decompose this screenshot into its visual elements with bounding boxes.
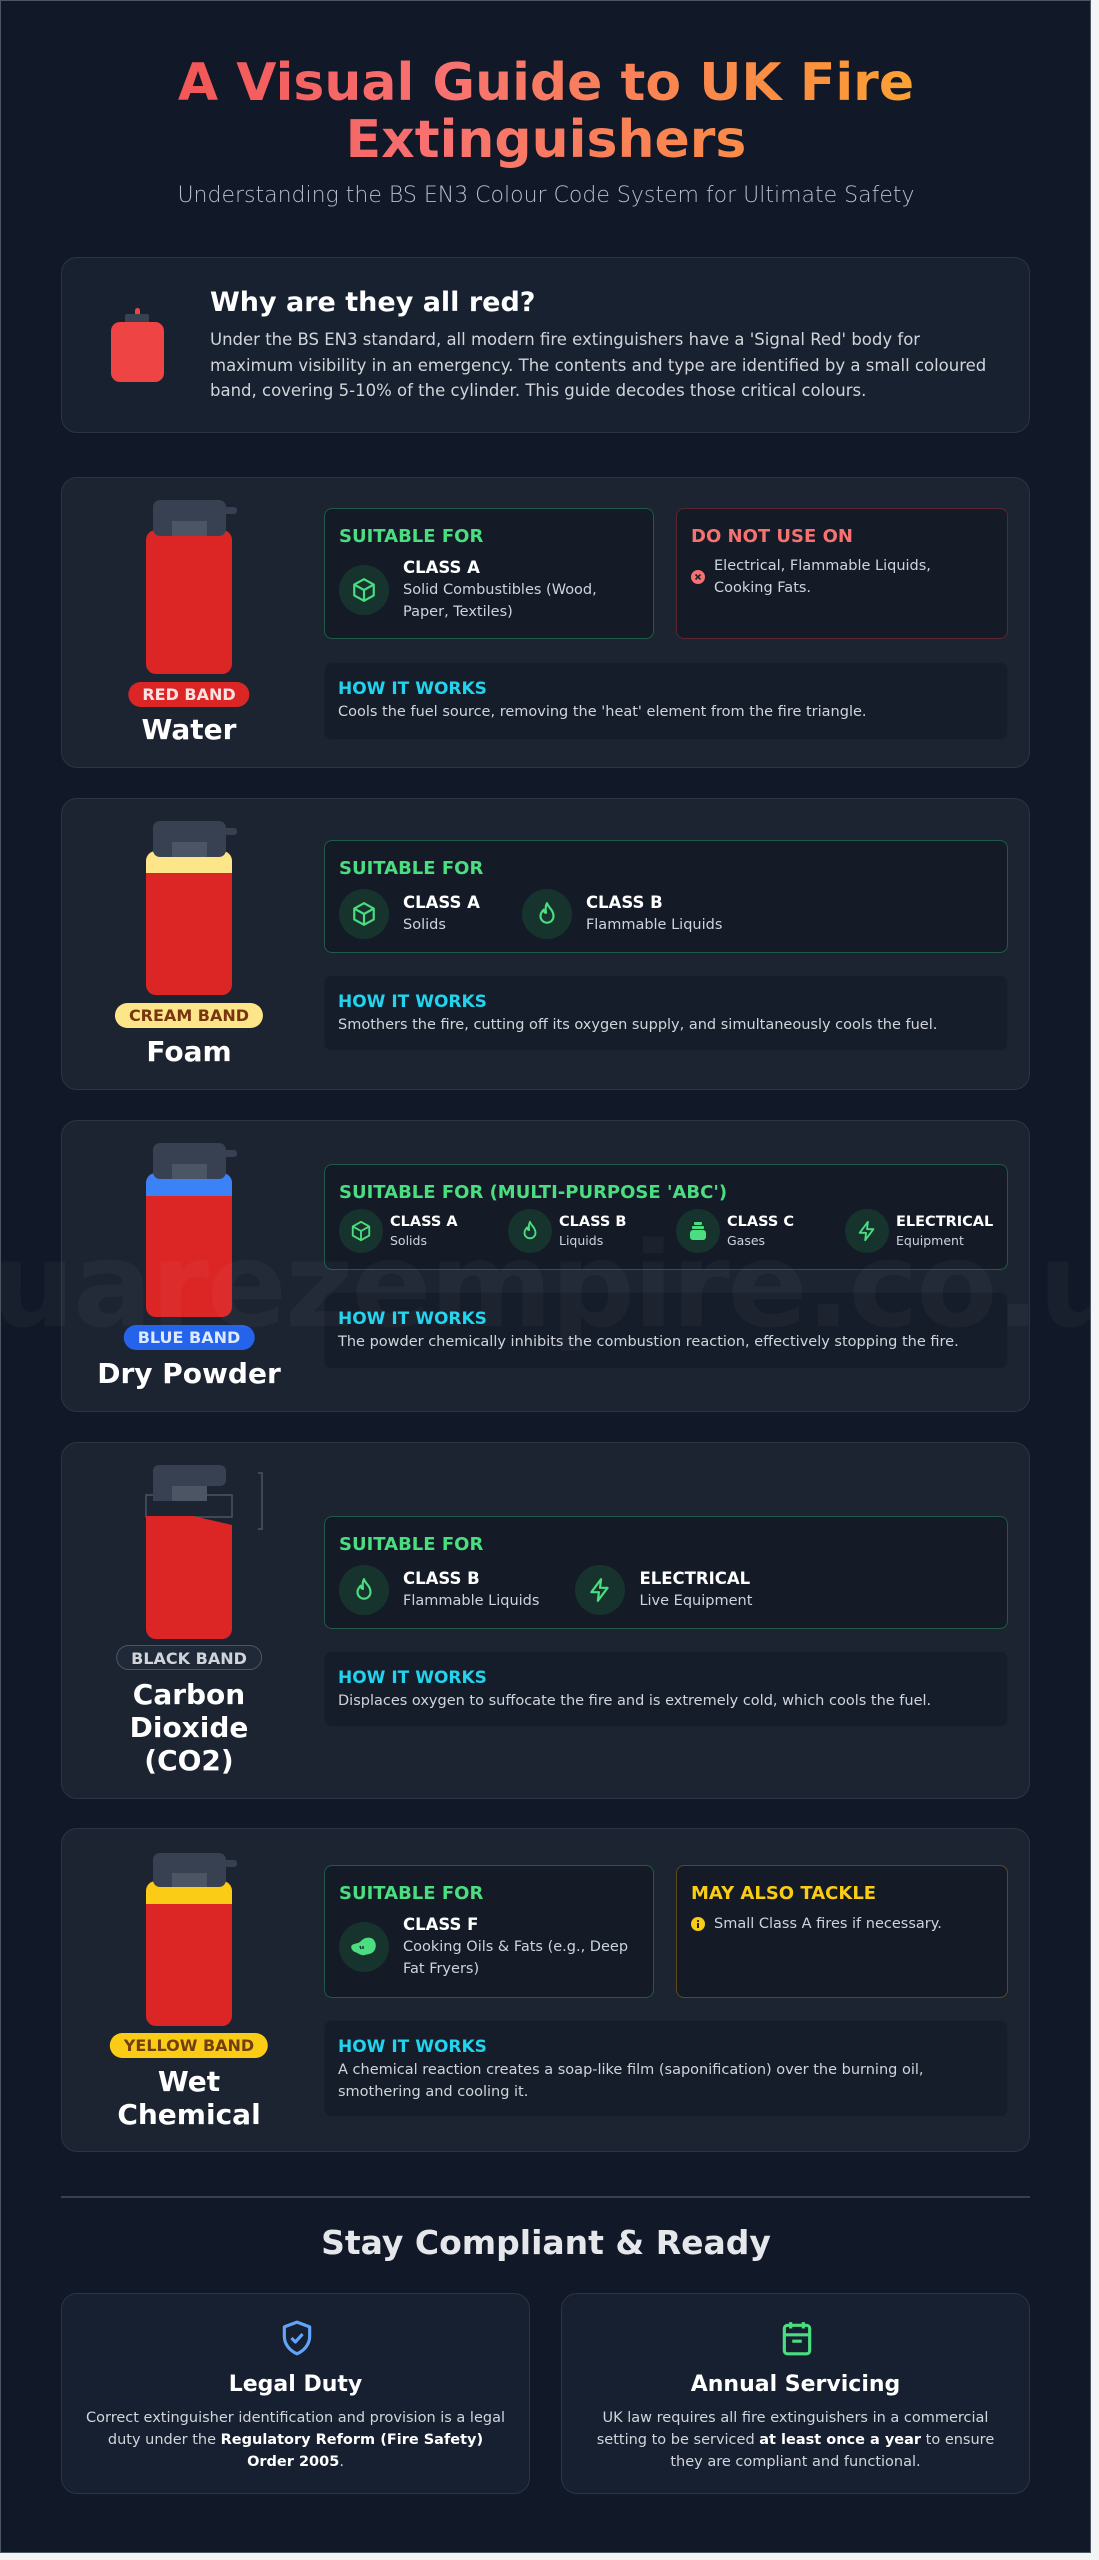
icon: cube (339, 889, 389, 939)
title (1, 55, 1091, 169)
panel: foam (61, 798, 1030, 1090)
band label: BLACK BAND (131, 1649, 247, 1668)
class C: CLASS C (727, 1214, 794, 1230)
suitable for: SUITABLE FOR (339, 1534, 483, 1555)
band label: RED BAND (142, 685, 236, 704)
how it works: Smothers the fire, cutting off its oxygen supply, and simultaneously cools the fuel. (338, 1017, 937, 1033)
class B (508, 1209, 626, 1253)
suitable for: Flammable Liquids (403, 1593, 539, 1609)
suitable for (324, 508, 654, 639)
panel: dry powder (61, 1120, 1030, 1412)
suitable for: Paper, Textiles) (403, 604, 513, 620)
how it works: HOW IT WORKS (338, 679, 487, 699)
text: duty under the Regulatory Reform (Fire Safety) (108, 2432, 483, 2448)
how it works: Cools the fuel source, removing the 'heat' element from the fire triangle. (338, 704, 867, 720)
name: Foam (146, 1035, 232, 1068)
how it works (324, 975, 1008, 1051)
suitable for: SUITABLE FOR (339, 858, 483, 879)
may also tackle: Small Class A fires if necessary. (714, 1916, 942, 1932)
suitable for (324, 840, 1008, 953)
suitable for (324, 1516, 1008, 1629)
suitable for: SUITABLE FOR (339, 1883, 483, 1904)
may also tackle: MAY ALSO TACKLE (691, 1883, 876, 1904)
band label: BLUE BAND (138, 1328, 240, 1347)
text: they are compliant and functional. (670, 2454, 921, 2470)
icon: extinguisher (111, 308, 164, 382)
heading: Why are they all red? (210, 287, 535, 318)
text: band, covering 5-10% of the cylinder. This guide decodes those critical colours. (210, 381, 866, 400)
panel: water (61, 477, 1030, 768)
icon: cube (339, 565, 389, 615)
icon: flame (339, 1565, 389, 1615)
suitable for: ELECTRICAL (639, 1569, 750, 1588)
panel: intro why red (61, 257, 1030, 433)
electrical: ELECTRICAL (896, 1214, 993, 1230)
panel: co2 (61, 1442, 1030, 1799)
icon: foam extinguisher (146, 821, 237, 995)
icon: calendar (782, 2322, 812, 2356)
do not use on: Cooking Fats. (714, 580, 811, 596)
do not use on: Electrical, Flammable Liquids, (714, 558, 931, 574)
class C: Gases (727, 1233, 765, 1248)
text: setting to be serviced at least once a year to ensure (597, 2432, 994, 2448)
icon: shield (282, 2320, 312, 2356)
suitable for: CLASS A (403, 893, 480, 912)
suitable for: CLASS B (586, 893, 663, 912)
how it works: A chemical reaction creates a soap-like film (saponification) over the burning oil, (338, 2062, 924, 2078)
band label (124, 1325, 254, 1350)
icon: water extinguisher (146, 500, 237, 674)
text (597, 2410, 994, 2470)
name: Wet (158, 2065, 220, 2098)
text: Order 2005. (247, 2454, 344, 2470)
do not use on (676, 508, 1008, 639)
text (86, 2410, 505, 2470)
text (210, 330, 986, 400)
how it works: Displaces oxygen to suffocate the fire and is extremely cold, which cools the fuel. (338, 1693, 931, 1709)
suitable for: Cooking Oils & Fats (e.g., Deep (403, 1939, 628, 1955)
title: Extinguishers (346, 110, 746, 170)
how it works: The powder chemically inhibits the combustion reaction, effectively stopping the fire. (338, 1334, 959, 1350)
how it works: HOW IT WORKS (338, 2037, 487, 2057)
how it works: smothering and cooling it. (338, 2084, 528, 2100)
name: (CO2) (144, 1744, 234, 1777)
may also tackle (676, 1865, 1008, 1998)
suitable for (324, 1164, 1008, 1270)
suitable for: SUITABLE FOR (MULTI-PURPOSE 'ABC') (339, 1182, 727, 1203)
electrical: Equipment (896, 1233, 964, 1248)
icon: pan/fat (339, 1922, 389, 1972)
panel: legal duty (61, 2293, 530, 2494)
subtitle: Understanding the BS EN3 Colour Code System for Ultimate Safety (177, 183, 915, 208)
icon: co2 extinguisher (145, 1465, 263, 1639)
class B: Liquids (559, 1233, 603, 1248)
suitable for (324, 1865, 654, 1998)
name: Chemical (117, 2098, 261, 2131)
text: UK law requires all fire extinguishers in a commercial (603, 2410, 988, 2426)
text: maximum visibility in an emergency. The contents and type are identified by a small coloured (210, 356, 986, 374)
suitable for: CLASS F (403, 1915, 478, 1934)
band label (115, 1003, 263, 1028)
panel: wet chemical (61, 1828, 1030, 2152)
text: Under the BS EN3 standard, all modern fire extinguishers have a 'Signal Red' body for (210, 330, 920, 349)
name: Dry Powder (97, 1357, 281, 1390)
how it works: HOW IT WORKS (338, 992, 487, 1012)
suitable for: SUITABLE FOR (339, 526, 483, 547)
icon: powder extinguisher (146, 1143, 237, 1317)
band label: CREAM BAND (129, 1006, 249, 1025)
class A: CLASS A (390, 1214, 458, 1230)
class A: Solids (390, 1233, 427, 1248)
suitable for: Live Equipment (639, 1593, 752, 1609)
name: Carbon (133, 1678, 245, 1711)
title: A Visual Guide to UK Fire (178, 53, 914, 113)
band label: YELLOW BAND (124, 2036, 254, 2055)
band label (116, 1645, 262, 1670)
do not use on: DO NOT USE ON (691, 526, 853, 547)
suitable for: CLASS B (403, 1569, 480, 1588)
how it works (324, 1651, 1008, 1727)
name (130, 1678, 248, 1777)
suitable for: Solid Combustibles (Wood, (403, 582, 597, 598)
class A (339, 1209, 458, 1253)
name (117, 2065, 261, 2131)
heading: Legal Duty (229, 2372, 362, 2397)
text: Correct extinguisher identification and provision is a legal (86, 2410, 505, 2426)
class B: CLASS B (559, 1214, 626, 1230)
name: Dioxide (130, 1711, 248, 1744)
suitable for: Solids (403, 917, 446, 933)
icon: x (691, 570, 705, 584)
band label (128, 682, 250, 707)
heading: Annual Servicing (691, 2372, 900, 2397)
class C (676, 1209, 794, 1253)
how it works (324, 2020, 1008, 2117)
icon: info (691, 1917, 705, 1931)
heading: stay compliant: Stay Compliant & Ready (321, 2223, 771, 2262)
icon: flame (522, 889, 572, 939)
how it works: HOW IT WORKS (338, 1668, 487, 1688)
name: Water (142, 713, 236, 746)
icon: bolt (575, 1565, 625, 1615)
band label (110, 2033, 268, 2058)
how it works (324, 1292, 1008, 1369)
suitable for: CLASS A (403, 558, 480, 577)
suitable for: Flammable Liquids (586, 917, 722, 933)
panel: annual servicing (561, 2293, 1030, 2494)
icon: wet chemical extinguisher (146, 1853, 237, 2026)
electrical (845, 1209, 993, 1253)
how it works (324, 662, 1008, 740)
suitable for: Fat Fryers) (403, 1961, 479, 1977)
how it works: HOW IT WORKS (338, 1309, 487, 1329)
